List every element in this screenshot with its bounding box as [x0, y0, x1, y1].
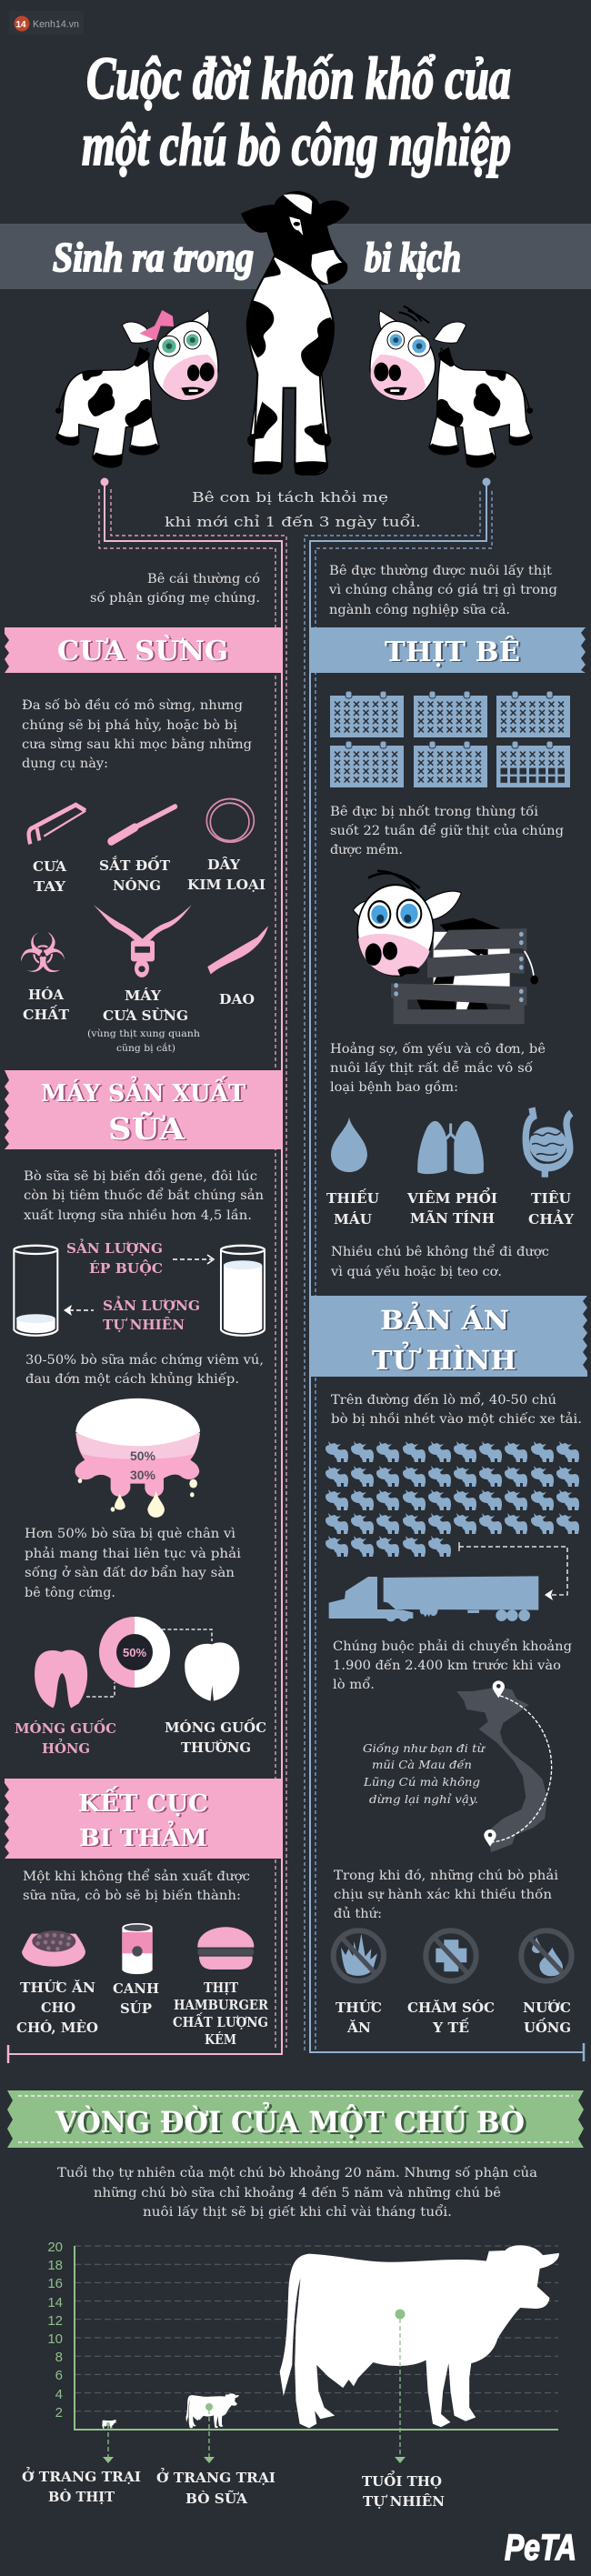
labels: forced and natural output: SẢN LƯỢNG: [103, 1296, 200, 1314]
labels: tools row 1: DÂY: [207, 857, 241, 873]
chart: lifespan: 14: [47, 2295, 63, 2310]
text: mastitis: đau đớn một cách khủng khiếp.: [25, 1372, 239, 1387]
labels: forced and natural output: [66, 1238, 200, 1333]
labels: end products: CHO: [41, 2000, 75, 2016]
labels: end products: THỨC ĂN: [20, 1980, 95, 1996]
text: female calves: [90, 572, 260, 606]
labels: end products: THỊT: [204, 1980, 238, 1996]
text: calves separated: [165, 490, 421, 530]
banner: milk machine: SỮA: [108, 1110, 185, 1147]
labels: forced and natural output: TỰ NHIÊN: [103, 1317, 185, 1333]
icon: dairy farm cow: [185, 2393, 239, 2429]
text: lameness: [25, 1527, 242, 1600]
connector: hooves: [86, 1629, 212, 1697]
text: crate: Bê đực bị nhốt trong thùng tối: [330, 805, 539, 819]
chart: lifespan: 10: [47, 2331, 63, 2347]
icon: hot iron: [111, 807, 175, 841]
icon: biohazard: ☣: [18, 922, 67, 986]
labels: tools row 1: KIM LOẠI: [187, 877, 265, 893]
text: male calves: ngành công nghiệp sữa cả.: [329, 603, 510, 617]
text: tragic end intro: sữa nữa, cô bò sẽ bị biến thành:: [23, 1889, 241, 1903]
text: map comparison: mũi Cà Mau đến: [372, 1758, 472, 1771]
labels: tools row 2: CƯA SỪNG: [103, 1007, 188, 1024]
labels: tools row 1: [33, 856, 265, 895]
text: calves separated: khi mới chỉ 1 đến 3 ngày tuổi.: [165, 514, 421, 530]
icon: blood drop: [331, 1118, 367, 1172]
logo: Kenh14: [9, 11, 84, 35]
labels: tools row 2: (vùng thịt xung quanh: [87, 1028, 200, 1039]
text: diseases intro: loại bệnh bao gồm:: [330, 1080, 458, 1095]
labels: end products: SÚP: [120, 2000, 152, 2017]
icon: intestines: [526, 1108, 571, 1178]
labels: end products: HAMBURGER: [174, 1998, 269, 2013]
text: female calves: Bê cái thường có: [147, 572, 260, 586]
labels: chart categories: BÒ SỮA: [185, 2490, 248, 2507]
text: milk intro: Bò sữa sẽ bị biến đổi gene, đôi lúc: [24, 1169, 257, 1184]
text: life cycle intro: những chú bò sữa chỉ khoảng 4 đến 5 năm và những chú bê: [94, 2186, 501, 2200]
icon: natural lifespan cow: [280, 2245, 559, 2428]
labels: deprivation: Y TẾ: [432, 2018, 469, 2036]
labels: forced and natural output: SẢN LƯỢNG: [66, 1238, 163, 1257]
labels: deprivation: UỐNG: [524, 2018, 571, 2036]
labels: hooves: MÓNG GUỐC: [165, 1718, 266, 1736]
labels: tools row 2: DAO: [219, 992, 255, 1007]
labels: tools row 2: cũng bị cắt): [116, 1042, 175, 1054]
icon: lungs: [417, 1121, 484, 1174]
band: born in tragedy: bi kịch: [365, 234, 461, 280]
icon: udder: 50%: [130, 1448, 156, 1463]
text: crate: được mềm.: [330, 843, 403, 857]
labels: chart categories: TUỔI THỌ: [362, 2471, 442, 2490]
labels: diseases: VIÊM PHỔI: [406, 1188, 497, 1207]
icon: beef farm cow: [102, 2420, 117, 2429]
icon: pet food bowl: [22, 1930, 85, 1967]
text: life cycle intro: [57, 2166, 537, 2220]
labels: chart categories: BÒ THỊT: [48, 2489, 115, 2505]
text: lameness: bê tông cứng.: [25, 1586, 115, 1600]
text: map comparison: dừng lại nghỉ vậy.: [369, 1792, 478, 1806]
banner: tragic end: [5, 1779, 281, 1859]
icon: white hoof: [185, 1642, 239, 1701]
icon: glass full milk: [221, 1246, 265, 1336]
labels: tools row 1: NÓNG: [113, 877, 161, 894]
text: lameness: Hơn 50% bò sữa bị què chân vì: [25, 1527, 236, 1541]
chart: 50% donut: [99, 1617, 170, 1688]
icon: no food: [334, 1930, 384, 1981]
text: dehorning intro: dụng cụ này:: [22, 757, 108, 771]
chart: lifespan: 4: [55, 2387, 63, 2402]
band: born in tragedy: [0, 224, 591, 289]
banner: tragic end: BI THẢM: [79, 1820, 207, 1852]
text: dehorning intro: [22, 698, 252, 771]
labels: tools row 1: SẮT ĐỐT: [99, 856, 170, 874]
icon: boy calf: [370, 306, 533, 467]
arrow: cows to truck: [459, 1542, 567, 1600]
text: deprivation: [334, 1869, 559, 1921]
chart: 50% donut: 50%: [123, 1646, 146, 1659]
labels: diseases: THIẾU: [326, 1188, 379, 1207]
text: too weak: [330, 1245, 549, 1279]
text: map comparison: Lũng Cú mà không: [363, 1775, 480, 1789]
text: truck: [331, 1393, 582, 1427]
band: born in tragedy: Sinh ra trong: [53, 234, 254, 280]
icon: udder: [75, 1398, 200, 1518]
labels: deprivation: THỨC: [336, 2000, 382, 2016]
labels: tools row 1: CƯA: [33, 859, 67, 875]
text: diseases intro: nuôi lấy thịt rất dễ mắc vô số: [330, 1061, 534, 1076]
chart: lifespan: 16: [47, 2276, 63, 2291]
banner: life cycle: VÒNG ĐỜI CỦA MỘT CHÚ BÒ: [55, 2101, 525, 2140]
labels: diseases: TIÊU: [531, 1190, 571, 1207]
text: milk intro: [24, 1169, 264, 1223]
text: deprivation: Trong khi đó, những chú bò phải: [334, 1869, 559, 1883]
labels: end products: CHÓ, MÈO: [16, 2020, 98, 2036]
icon: no water: [521, 1930, 572, 1981]
text: milk intro: còn bị tiêm thuốc để bắt chúng sản: [24, 1188, 264, 1203]
labels: end products: [16, 1980, 269, 2048]
icon: girl calf: [55, 310, 218, 467]
banner: life cycle: [7, 2090, 584, 2148]
map: Vietnam route: [456, 1680, 552, 1852]
text: deprivation: đủ thứ:: [334, 1907, 382, 1921]
text: dehorning intro: chúng sẽ bị phá hủy, hoặc bò bị: [22, 718, 238, 733]
labels: tools row 1: TAY: [34, 879, 66, 895]
banner: dehorning: [5, 627, 281, 673]
banner: tragic end: KẾT CỤC: [78, 1786, 208, 1818]
labels: tools row 2: CHẤT: [23, 1005, 69, 1023]
icon: knife: [207, 926, 268, 974]
text: tragic end intro: [23, 1869, 250, 1903]
labels: deprivation: [336, 2000, 571, 2036]
chart: lifespan: 8: [55, 2350, 63, 2365]
labels: hooves: HỎNG: [42, 1739, 90, 1757]
banner: milk machine: [5, 1070, 281, 1149]
chart: lifespan: 2: [55, 2405, 63, 2421]
chart: lifespan: 6: [55, 2368, 63, 2383]
text: map comparison: [363, 1741, 486, 1806]
labels: diseases: MÁU: [334, 1211, 372, 1228]
chart: lifespan: 12: [47, 2313, 63, 2329]
icon: hamburger: [197, 1927, 254, 1970]
text: calves separated: Bê con bị tách khỏi mẹ: [192, 490, 388, 506]
text: crate: suốt 22 tuần để giữ thịt của chúng: [330, 824, 564, 838]
icon: wire: [206, 799, 254, 842]
title: [82, 45, 511, 178]
banner: milk machine: MÁY SẢN XUẤT: [41, 1076, 246, 1108]
text: diseases intro: [330, 1042, 546, 1095]
text: map comparison: Giống như bạn đi từ: [363, 1741, 486, 1755]
labels: forced and natural output: ÉP BUỘC: [89, 1259, 163, 1277]
banner: dehorning: CƯA SỪNG: [57, 635, 228, 667]
chart: 45 cows pictogram: [326, 1441, 579, 1557]
icon: glass low milk: [14, 1246, 57, 1336]
text: crate: [330, 805, 564, 857]
icon: soup can: [122, 1923, 153, 1974]
labels: deprivation: ĂN: [346, 2020, 371, 2036]
arrow: to full glass: [173, 1255, 214, 1264]
icon: pink hoof: [35, 1650, 87, 1708]
icon: calf in crate: [353, 871, 538, 1024]
banner: veal: THỊT BÊ: [385, 636, 520, 668]
labels: end products: KÉM: [205, 2031, 236, 2048]
text: distance: [333, 1639, 572, 1692]
text: deprivation: chịu sự hành xác khi thiếu thốn: [334, 1888, 552, 1902]
text: male calves: [328, 564, 557, 617]
labels: chart categories: TỰ NHIÊN: [363, 2493, 445, 2510]
icon: udder: 30%: [130, 1468, 156, 1482]
text: truck: bò bị nhồi nhét vào một chiếc xe tải.: [331, 1412, 582, 1427]
arrow: to low glass: [64, 1305, 94, 1316]
labels: end products: CANH: [113, 1981, 159, 1997]
text: distance: 1.900 đến 2.400 km trước khi vào: [333, 1659, 561, 1673]
banner: death sentence: BẢN ÁN: [380, 1300, 509, 1336]
labels: end products: CHẤT LƯỢNG: [173, 2012, 268, 2030]
text: distance: lò mổ.: [333, 1678, 375, 1692]
text: mastitis: [25, 1353, 264, 1387]
icon: hand saw: [29, 805, 85, 844]
text: dehorning intro: cưa sừng sau khi mọc bằng những: [22, 737, 252, 752]
chart: lifespan: 20: [47, 2240, 63, 2255]
labels: tools row 2: [23, 987, 255, 1054]
logo: Kenh14: Kenh14.vn: [33, 19, 79, 30]
chart: 22 week calendars: [330, 691, 570, 787]
text: mastitis: 30-50% bò sữa mắc chứng viêm vú,: [25, 1353, 264, 1368]
labels: hooves: [15, 1718, 266, 1757]
labels: tools row 2: HÓA: [28, 987, 65, 1003]
labels: hooves: THƯỜNG: [181, 1739, 251, 1756]
marker lines: [103, 2310, 406, 2463]
labels: diseases: MÃN TÍNH: [410, 1209, 495, 1227]
labels: chart categories: Ở TRANG TRẠI: [22, 2467, 141, 2485]
labels: chart categories: [22, 2467, 445, 2510]
text: dehorning intro: Đa số bò đều có mô sừng, nhưng: [22, 698, 243, 713]
text: diseases intro: Hoảng sợ, ốm yếu và cô đơn, bê: [330, 1042, 546, 1057]
icon: truck: [329, 1576, 538, 1621]
labels: diseases: [326, 1188, 575, 1228]
banner: death sentence: [310, 1296, 587, 1377]
text: tragic end intro: Một khi không thể sản xuất được: [23, 1869, 250, 1884]
text: too weak: Nhiều chú bê không thể đi được: [331, 1245, 549, 1259]
labels: deprivation: CHĂM SÓC: [407, 2000, 495, 2016]
banner: death sentence: TỬ HÌNH: [372, 1340, 516, 1376]
text: lameness: sống ở sàn đất dơ bẩn hay sàn: [25, 1566, 235, 1580]
banner: veal: [309, 627, 586, 673]
text: female calves: số phận giống mẹ chúng.: [90, 591, 260, 606]
text: life cycle intro: nuôi lấy thịt sẽ bị giết khi chỉ vài tháng tuổi.: [143, 2205, 452, 2220]
chart: lifespan: [47, 2240, 559, 2463]
icon: mother cow: [241, 191, 349, 476]
text: male calves: Bê đực thường được nuôi lấy thịt: [329, 564, 553, 578]
timeline: pink path: [8, 478, 286, 2063]
icon: dehorner: [94, 905, 192, 977]
text: milk intro: xuất lượng sữa nhiều hơn 4,5 lần.: [24, 1208, 252, 1223]
chart: lifespan: 18: [47, 2258, 63, 2273]
timeline: blue path: [305, 478, 584, 2061]
labels: chart categories: Ở TRANG TRẠI: [156, 2468, 275, 2486]
text: distance: Chúng buộc phải di chuyển khoảng: [333, 1639, 572, 1654]
labels: hooves: MÓNG GUỐC: [15, 1719, 116, 1737]
text: life cycle intro: Tuổi thọ tự nhiên của một chú bò khoảng 20 năm. Nhưng số phận của: [57, 2166, 537, 2180]
icon: no medical care: [426, 1930, 476, 1981]
text: too weak: vì quá yếu hoặc bị teo cơ.: [330, 1265, 502, 1279]
labels: diseases: CHẢY: [528, 1209, 575, 1228]
text: male calves: vì chúng chẳng có giá trị gì trong: [328, 582, 557, 597]
labels: deprivation: NƯỚC: [523, 2000, 571, 2016]
text: truck: Trên đường đến lò mổ, 40-50 chú: [331, 1393, 556, 1408]
logo: Kenh14: 14: [16, 20, 26, 30]
labels: tools row 2: MÁY: [125, 987, 162, 1004]
text: lameness: phải mang thai liên tục và phải: [25, 1547, 242, 1561]
